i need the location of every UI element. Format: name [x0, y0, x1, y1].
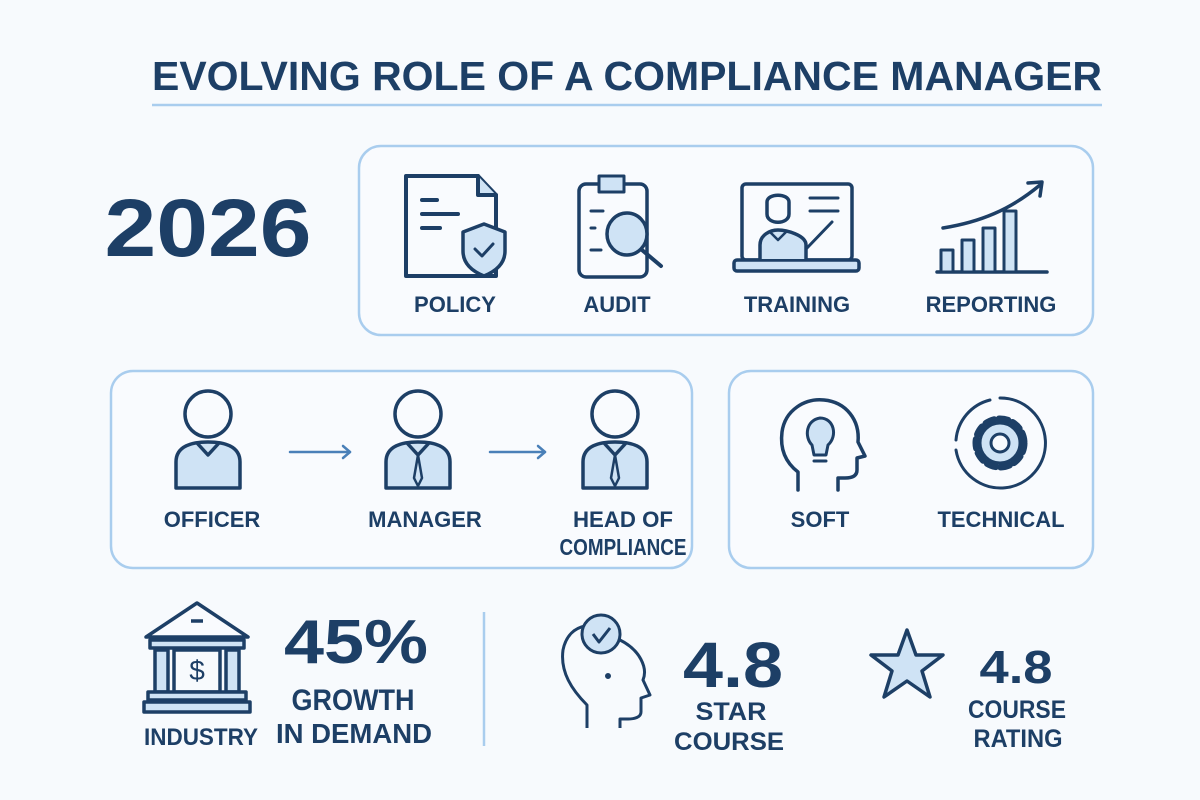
- labels: skills: SOFT: [791, 507, 850, 532]
- labels: career: [164, 507, 686, 560]
- icon: policy: [406, 176, 505, 276]
- text: 45%: [284, 608, 428, 677]
- icon: officer: [176, 391, 240, 488]
- text: GROWTH: [292, 684, 414, 717]
- panel: career path: [111, 371, 692, 568]
- labels: career: OFFICER: [164, 507, 260, 532]
- stat: star course: [563, 615, 784, 756]
- labels: duties: REPORTING: [926, 292, 1056, 317]
- panel: duties: [359, 146, 1093, 335]
- icon: star: [871, 630, 943, 697]
- labels: duties: POLICY: [414, 292, 496, 317]
- stat: course rating: [871, 630, 1066, 753]
- labels: duties: AUDIT: [583, 292, 651, 317]
- divider: [483, 612, 485, 746]
- arrow: [290, 446, 350, 458]
- stat: course rating: COURSE: [968, 696, 1066, 724]
- labels: skills: [791, 507, 1065, 532]
- icon: technical gear: [956, 398, 1045, 488]
- stat: course rating: 4.8: [980, 641, 1052, 693]
- icon: training: [734, 184, 859, 271]
- stat: industry growth: [144, 603, 250, 712]
- year 2026: 2026: [104, 183, 312, 274]
- icon: manager: [386, 391, 450, 488]
- stat: star course: 4.8: [683, 629, 783, 701]
- arrow: [490, 446, 545, 458]
- text: IN DEMAND: [276, 718, 432, 749]
- icon: audit: [579, 176, 661, 277]
- icon: reporting: [937, 182, 1047, 272]
- icon: head with check: [563, 615, 650, 728]
- icon: bank: $: [189, 655, 205, 686]
- labels: skills: TECHNICAL: [937, 507, 1065, 532]
- labels: career: HEAD OF: [573, 507, 673, 532]
- icon: soft skills head: [782, 400, 865, 490]
- icon: head of compliance: [583, 391, 647, 488]
- title: EVOLVING ROLE OF A COMPLIANCE MANAGER: [152, 53, 1102, 99]
- labels: duties: TRAINING: [744, 292, 850, 317]
- stat: course rating: RATING: [974, 725, 1062, 753]
- labels: duties: [414, 292, 1056, 317]
- stat: star course: COURSE: [674, 728, 784, 756]
- panel: skills: [729, 371, 1093, 568]
- labels: career: MANAGER: [368, 507, 482, 532]
- text: INDUSTRY: [144, 724, 258, 751]
- stat: star course: STAR: [696, 698, 766, 726]
- labels: career: COMPLIANCE: [560, 534, 686, 560]
